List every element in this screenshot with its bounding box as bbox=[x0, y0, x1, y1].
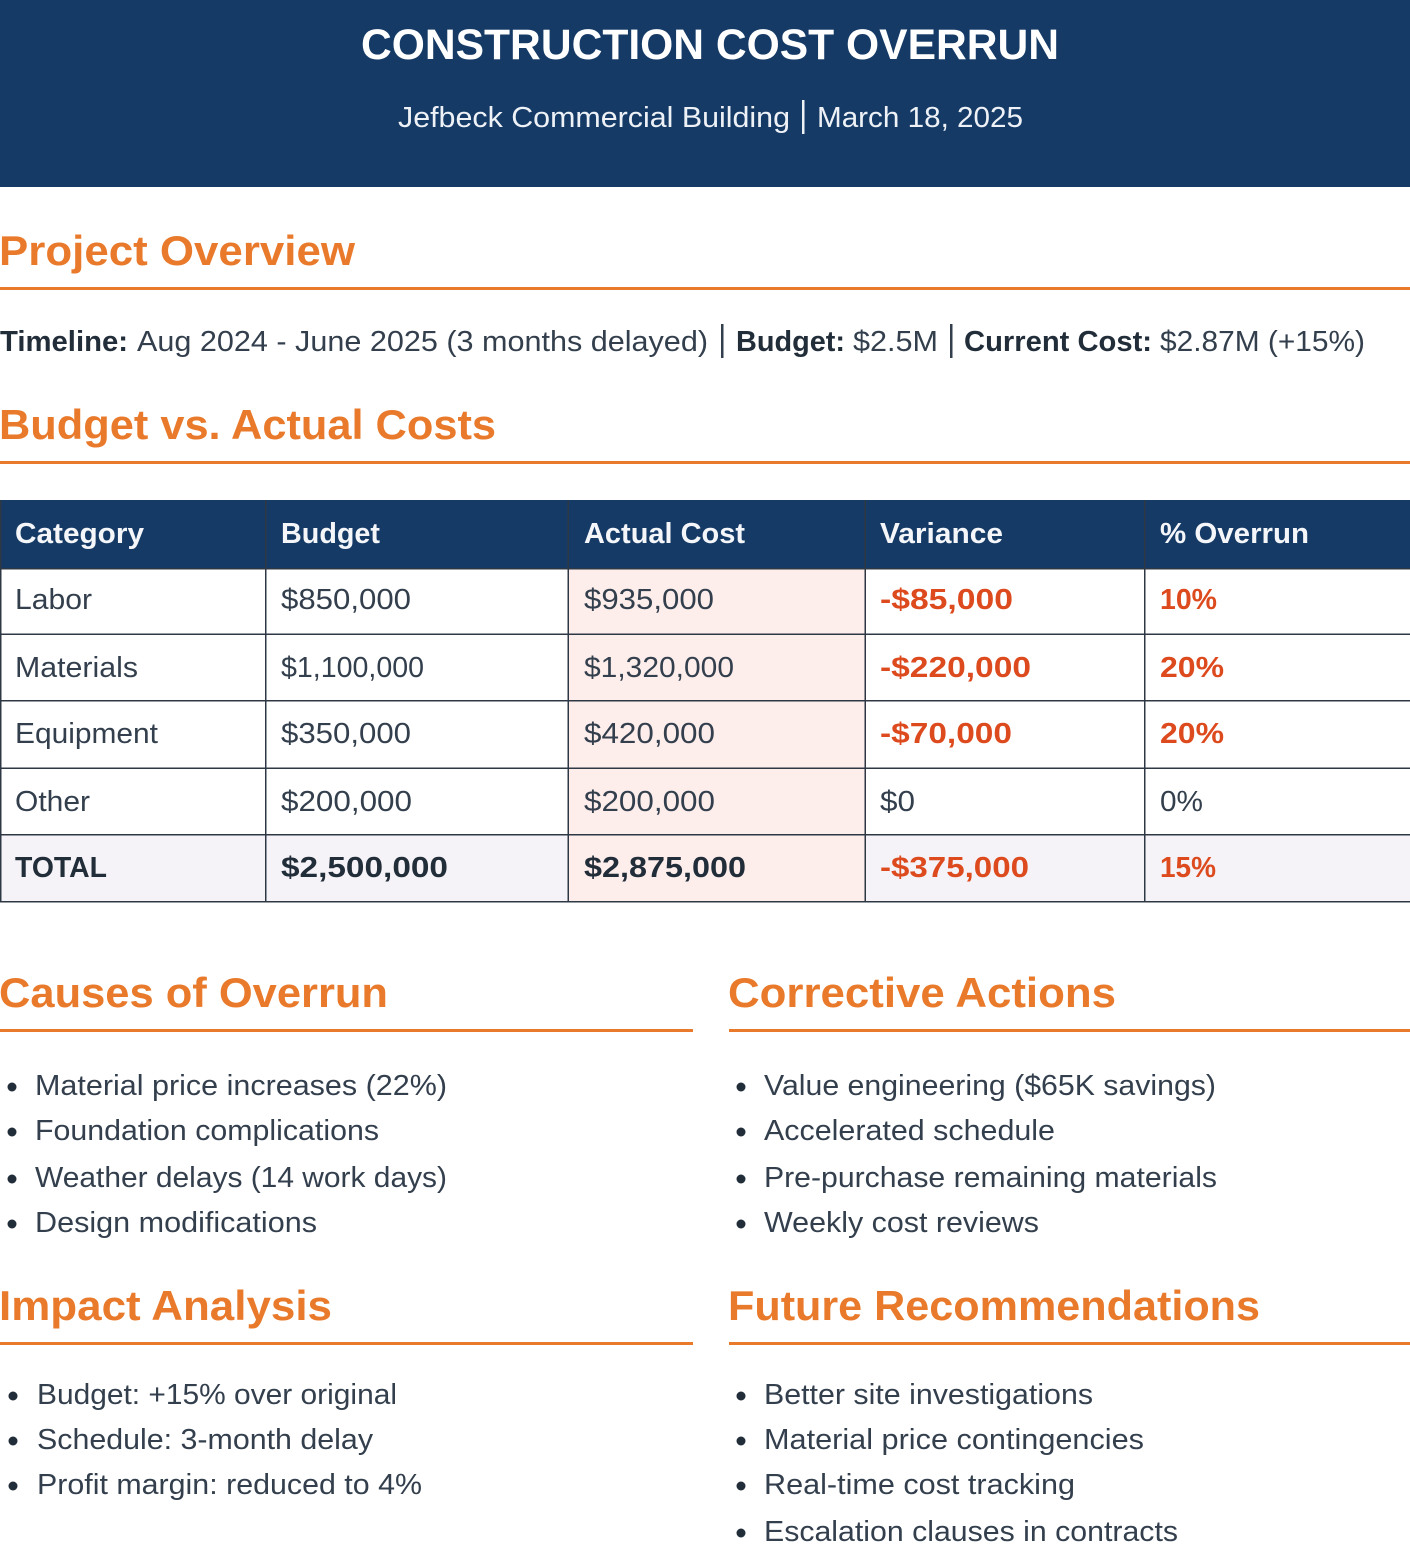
row: labor bbox=[15, 584, 1217, 616]
panel: project overview bbox=[0, 227, 1410, 358]
text block: overview facts: Aug 2024 - June 2025 (3 months delayed) bbox=[137, 326, 708, 358]
table: budget vs actual costs bbox=[0, 500, 1410, 902]
row: total: 15% bbox=[1160, 852, 1216, 884]
row: labor: -$85,000 bbox=[880, 584, 1013, 616]
row: total: -$375,000 bbox=[880, 852, 1029, 884]
row: materials: $1,320,000 bbox=[584, 652, 734, 684]
heading: future recommendations: Future Recommendations bbox=[728, 1282, 1260, 1329]
text block: overview facts: $2.5M bbox=[853, 326, 938, 358]
row: other: $200,000 bbox=[584, 786, 715, 818]
list: causes: Foundation complications bbox=[35, 1115, 379, 1147]
list: corrective actions bbox=[736, 1070, 1217, 1239]
text block: overview facts: Current Cost: bbox=[964, 326, 1152, 358]
list: impact: Budget: +15% over original bbox=[37, 1379, 397, 1411]
panel: budget vs actual costs bbox=[0, 401, 1410, 902]
row: total: TOTAL bbox=[15, 852, 107, 884]
list: corrective actions: Pre-purchase remaining materials bbox=[764, 1162, 1217, 1194]
table header row: % Overrun bbox=[1160, 518, 1309, 550]
row: total: $2,875,000 bbox=[584, 852, 746, 884]
heading: impact analysis bbox=[0, 1282, 693, 1345]
heading: budget vs actual bbox=[0, 401, 1410, 464]
heading: project overview: Project Overview bbox=[0, 227, 355, 274]
text block: overview facts: Budget: bbox=[736, 326, 845, 358]
text block: overview facts: Timeline: bbox=[0, 326, 128, 358]
list: recommendations bbox=[736, 1379, 1178, 1548]
panel: impact analysis bbox=[0, 1282, 693, 1501]
table header row bbox=[15, 518, 1309, 550]
list: corrective actions: Value engineering ($65K savings) bbox=[764, 1070, 1216, 1102]
row: materials: $1,100,000 bbox=[281, 652, 424, 684]
subtitle: March 18, 2025 bbox=[817, 102, 1023, 134]
row: equipment: $420,000 bbox=[584, 718, 715, 750]
subtitle: Jefbeck Commercial Building bbox=[398, 102, 790, 134]
panel: corrective actions bbox=[728, 969, 1410, 1239]
row: materials: 20% bbox=[1160, 652, 1224, 684]
row: labor: $850,000 bbox=[281, 584, 411, 616]
heading: corrective actions: Corrective Actions bbox=[728, 969, 1116, 1016]
table header row: Budget bbox=[281, 518, 380, 550]
list: impact: Profit margin: reduced to 4% bbox=[37, 1469, 422, 1501]
row: materials: -$220,000 bbox=[880, 652, 1031, 684]
row: other: $200,000 bbox=[281, 786, 412, 818]
list: corrective actions: Weekly cost reviews bbox=[764, 1207, 1039, 1239]
row: materials bbox=[15, 652, 1224, 684]
list: corrective actions: Accelerated schedule bbox=[764, 1115, 1055, 1147]
row: total bbox=[15, 852, 1216, 884]
row: labor: Labor bbox=[15, 584, 92, 616]
row: equipment: $350,000 bbox=[281, 718, 411, 750]
table header row: Actual Cost bbox=[584, 518, 745, 550]
list: recommendations: Better site investigations bbox=[764, 1379, 1093, 1411]
title: CONSTRUCTION COST OVERRUN bbox=[361, 21, 1059, 69]
panel: future recommendations bbox=[728, 1282, 1410, 1548]
table header row: Category bbox=[15, 518, 144, 550]
heading: budget vs actual: Budget vs. Actual Costs bbox=[0, 401, 496, 448]
panel: causes of overrun bbox=[0, 969, 693, 1239]
list: impact: Schedule: 3-month delay bbox=[37, 1424, 374, 1456]
heading: causes of overrun bbox=[0, 969, 693, 1032]
list: causes bbox=[8, 1070, 447, 1239]
row: other bbox=[15, 786, 1203, 818]
row: other: 0% bbox=[1160, 786, 1203, 818]
list: causes: Design modifications bbox=[35, 1207, 317, 1239]
list: recommendations: Escalation clauses in contracts bbox=[764, 1516, 1178, 1548]
text block: overview facts: $2.87M (+15%) bbox=[1160, 326, 1365, 358]
header banner bbox=[0, 0, 1410, 187]
list: recommendations: Material price contingencies bbox=[764, 1424, 1144, 1456]
heading: causes of overrun: Causes of Overrun bbox=[0, 969, 388, 1016]
row: labor: $935,000 bbox=[584, 584, 714, 616]
heading: corrective actions bbox=[728, 969, 1410, 1032]
row: equipment bbox=[15, 718, 1224, 750]
row: equipment: -$70,000 bbox=[880, 718, 1012, 750]
row: labor: 10% bbox=[1160, 584, 1217, 616]
list: impact bbox=[8, 1379, 422, 1501]
row: materials: Materials bbox=[15, 652, 138, 684]
heading: future recommendations bbox=[728, 1282, 1410, 1345]
row: equipment: 20% bbox=[1160, 718, 1224, 750]
heading: impact analysis: Impact Analysis bbox=[0, 1282, 332, 1329]
subtitle bbox=[398, 100, 1023, 134]
row: total: $2,500,000 bbox=[281, 852, 448, 884]
heading: project overview bbox=[0, 227, 1410, 290]
row: equipment: Equipment bbox=[15, 718, 158, 750]
list: causes: Weather delays (14 work days) bbox=[35, 1162, 447, 1194]
list: recommendations: Real-time cost tracking bbox=[764, 1469, 1075, 1501]
table header row: Variance bbox=[880, 518, 1003, 550]
row: other: Other bbox=[15, 786, 90, 818]
text block: overview facts bbox=[0, 324, 1365, 358]
row: other: $0 bbox=[880, 786, 915, 818]
list: causes: Material price increases (22%) bbox=[35, 1070, 447, 1102]
